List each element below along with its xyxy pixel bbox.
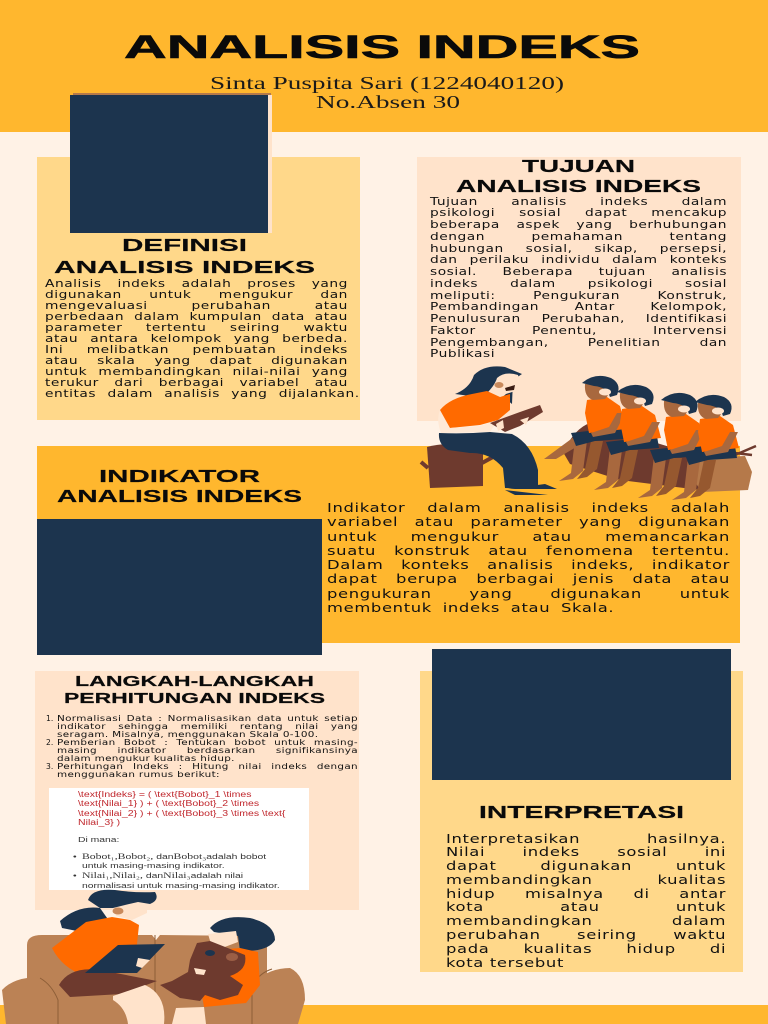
text: tujuan body: Publikasi (430, 348, 495, 360)
heading: tujuan: ANALISIS INDEKS (456, 176, 701, 196)
image placeholder: indikator navy block (37, 519, 322, 655)
text: indikator body: variabel atau parameter yang digunakan (327, 514, 730, 529)
text: langkah list: Pemberian Bobot : Tentukan bobot untuk masing- (57, 738, 358, 746)
list numbers: 3. (46, 762, 53, 770)
title: ANALISIS INDEKS (124, 29, 640, 65)
text: tujuan body: Tujuan analisis indeks dalam (430, 196, 727, 208)
formula explanation: • (73, 852, 77, 861)
text: interpretasi body: pada kualitas hidup di (446, 941, 726, 956)
heading: indikator: INDIKATOR (99, 466, 261, 486)
formula white box (49, 788, 309, 890)
panel: langkah background (35, 671, 359, 910)
formula explanation: Nilai₁,Nilai₂, danNilai₃adalah nilai (82, 871, 243, 880)
text: definisi body: Analisis indeks adalah proses yang (45, 278, 348, 290)
heading: langkah (64, 674, 326, 707)
text: tujuan body: Faktor Penentu, Intervensi (430, 325, 727, 337)
children (544, 376, 739, 500)
text: definisi body: entitas dalam analisis yang dijalankan. (45, 388, 360, 400)
heading: definisi: ANALISIS INDEKS (54, 257, 315, 277)
header band (0, 0, 768, 132)
text: interpretasi body: Interpretasikan hasilnya. (446, 830, 726, 846)
text: indikator body: Indikator dalam analisis indeks adalah (327, 500, 730, 515)
heading: interpretasi: INTERPRETASI (479, 802, 684, 822)
text: definisi body: perbedaan dalam kumpulan data atau (45, 311, 348, 323)
heading: langkah: LANGKAH-LANGKAH (75, 674, 314, 690)
text: tujuan body: indeks dalam psikologi sosial (430, 278, 727, 290)
formula text (78, 790, 286, 827)
heading: definisi: DEFINISI (122, 235, 247, 255)
text: interpretasi body: membandingkan kualitas (446, 872, 726, 887)
text: definisi body: parameter tertentu seiring waktu (45, 322, 348, 334)
text: interpretasi body: hidup misalnya di antar (446, 886, 726, 901)
panel: definisi background (37, 157, 360, 420)
sofa (2, 935, 305, 1024)
bottom band (0, 1005, 768, 1024)
text: tujuan body: sosial. Beberapa tujuan analisis (430, 266, 727, 278)
text: langkah list: Normalisasi Data : Normalisasikan data untuk setiap (57, 714, 358, 722)
text: tujuan body: Penulusuran Perubahan, Identifikasi (430, 313, 727, 325)
teacher (438, 366, 557, 495)
formula text: Nilai_3} ) (78, 818, 120, 827)
text: langkah list: Perhitungan Indeks : Hitung nilai indeks dengan (57, 762, 358, 770)
text: tujuan body: dengan pemahaman tentang (430, 231, 727, 243)
text: langkah list: dalam mengukur kualitas hidup. (57, 754, 235, 762)
text: definisi body: Ini melibatkan pembuatan indeks (45, 344, 348, 356)
text: tujuan body: Pengembangan, Penelitian dan (430, 337, 727, 349)
heading: definisi (54, 235, 315, 277)
heading: tujuan: TUJUAN (522, 156, 635, 176)
panel: indikator background (37, 446, 740, 643)
image placeholder: top navy square (70, 95, 268, 233)
heading: tujuan (456, 156, 701, 196)
text: langkah list: indikator sehingga memiliki rentang nilai yang (57, 722, 358, 730)
list numbers: 1. (46, 714, 53, 722)
text: definisi body: digunakan untuk mengukur dan (45, 289, 348, 301)
formula explanation: • (73, 871, 77, 880)
illustration: mother and child on sofa (2, 890, 305, 1024)
formula text: \text{Indeks} = ( \text{Bobot}_1 \times (78, 790, 251, 798)
text: langkah list: menggunakan rumus berikut: (57, 770, 220, 778)
illustration: reading teacher with children (421, 366, 756, 500)
panel: tujuan background (417, 157, 741, 421)
formula explanation: untuk masing-masing indikator. (82, 861, 225, 870)
text: tujuan body: dan perilaku individu dalam konteks (430, 254, 727, 266)
text: definisi body: mengevaluasi perubahan atau (45, 300, 348, 312)
formula text: \text{Nilai_2} ) + ( \text{Bobot}_3 \times \text{ (78, 809, 285, 818)
text: interpretasi body: perubahan seiring waktu (446, 927, 726, 942)
formula explanation: Di mana: (78, 835, 119, 844)
list numbers: 2. (46, 738, 53, 746)
text: langkah list: masing indikator berdasarkan signifikansinya (57, 746, 358, 754)
text: indikator body: dapat berupa berbagai jenis data atau (327, 571, 730, 586)
text: tujuan body (430, 196, 727, 360)
author name: Sinta Puspita Sari (1224040120) (210, 73, 564, 94)
text: interpretasi body: Nilai indeks sosial ini (446, 844, 726, 859)
text: indikator body: untuk mengukur atau memancarkan (327, 529, 730, 544)
formula text: \text{Nilai_1} ) + ( \text{Bobot}_2 \times (78, 799, 259, 808)
formula explanation (73, 835, 280, 890)
list numbers (46, 714, 53, 770)
text: interpretasi body: membandingkan dalam (446, 913, 726, 928)
image placeholder: interpretasi navy block (432, 649, 731, 780)
text: indikator body (327, 500, 730, 615)
text: interpretasi body: kota atau untuk (446, 899, 726, 914)
tree stump (421, 444, 493, 488)
text: tujuan body: hubungan sosial, sikap, persepsi, (430, 243, 727, 255)
text: definisi body (45, 278, 360, 400)
text: definisi body: untuk membandingkan nilai-nilai yang (45, 366, 348, 378)
text: indikator body: Dalam konteks analisis indeks, indikator (327, 557, 730, 572)
child with bear (160, 917, 275, 1024)
text: langkah list: seragam. Misalnya, menggunakan Skala 0-100. (57, 730, 318, 738)
panel: interpretasi background (420, 671, 743, 972)
heading: indikator (57, 466, 302, 506)
log bench (563, 423, 756, 492)
heading: langkah: PERHITUNGAN INDEKS (64, 691, 326, 707)
formula explanation: Bobot₁,Bobot₂, danBobot₃adalah bobot (82, 852, 266, 860)
text: tujuan body: Pembandingan Antar Kelompok, (430, 301, 727, 313)
text: langkah list (57, 714, 358, 778)
text: indikator body: pengukuran yang digunakan untuk (327, 586, 730, 601)
text: tujuan body: meliputi: Pengukuran Konstruk, (430, 290, 727, 302)
text: indikator body: membentuk indeks atau Skala. (327, 600, 614, 615)
text: interpretasi body: dapat digunakan untuk (446, 858, 726, 873)
text: tujuan body: psikologi sosial dapat mencakup (430, 207, 727, 219)
text: indikator body: suatu konstruk atau fenomena tertentu. (327, 543, 730, 558)
text: definisi body: atau antara kelompok yang berbeda. (45, 333, 348, 345)
text: definisi body: atau skala yang dapat digunakan (45, 355, 348, 367)
text: interpretasi body (446, 830, 726, 970)
heading: indikator: ANALISIS INDEKS (57, 486, 302, 506)
absen number: No.Absen 30 (316, 92, 460, 112)
text: definisi body: terukur dari berbagai variabel atau (45, 377, 348, 389)
formula explanation: normalisasi untuk masing-masing indikator. (82, 881, 280, 890)
text: tujuan body: beberapa aspek yang berhubungan (430, 219, 727, 231)
text: interpretasi body: kota tersebut (446, 955, 564, 970)
seated woman (52, 890, 165, 1024)
